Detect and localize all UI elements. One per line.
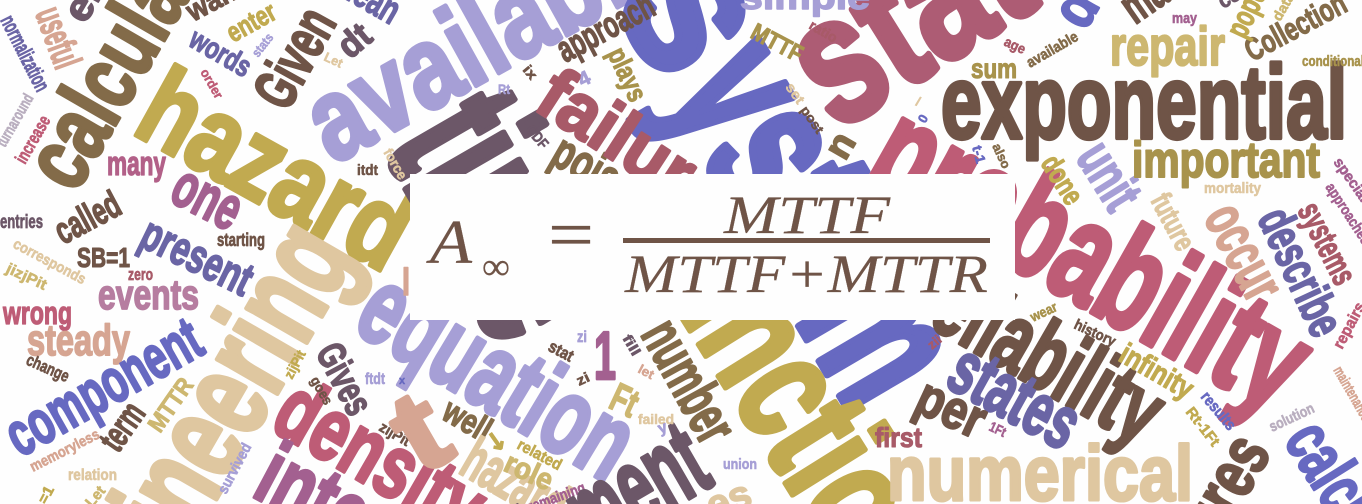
- word: mortality: mortality: [1204, 180, 1262, 197]
- word: 0: 0: [915, 112, 931, 126]
- word: MTTR: MTTR: [143, 373, 199, 437]
- word: stats: stats: [249, 30, 276, 60]
- word: useful: useful: [27, 1, 89, 74]
- word: words: words: [183, 22, 257, 84]
- word: survived: survived: [215, 440, 255, 497]
- word: present: present: [132, 207, 261, 307]
- word: well: well: [435, 391, 499, 450]
- word: 4: 4: [575, 67, 595, 92]
- word: SB=1: SB=1: [77, 242, 130, 273]
- word: Ft: Ft: [603, 375, 645, 426]
- word: ratio: ratio: [806, 17, 840, 46]
- word: wrong: wrong: [2, 295, 72, 331]
- word: MTTF: MTTF: [746, 18, 807, 68]
- word: may: may: [1172, 10, 1198, 27]
- word: age: age: [1002, 33, 1029, 57]
- word: union: union: [723, 456, 757, 473]
- formula panel: [410, 174, 1015, 320]
- word: many: many: [107, 145, 166, 183]
- word: change: change: [23, 350, 72, 386]
- word: failure: failure: [523, 52, 745, 236]
- numerator: MTTF: [723, 185, 891, 245]
- word: 1Ft: 1Ft: [987, 418, 1009, 440]
- word: Gives: Gives: [307, 336, 381, 422]
- word: entries: entries: [0, 212, 43, 233]
- word: important: important: [1132, 132, 1320, 188]
- word: set: set: [783, 80, 808, 107]
- word: repair: repair: [1110, 15, 1225, 77]
- word: infinity: infinity: [1114, 337, 1199, 406]
- word: zero: zero: [128, 265, 153, 284]
- word: x: x: [399, 375, 406, 387]
- word: zi brown: zi: [574, 369, 592, 389]
- word: corresponds: corresponds: [10, 236, 89, 288]
- word: called: called: [48, 183, 128, 253]
- word: first: first: [875, 422, 922, 453]
- word: Rt: Rt: [498, 81, 510, 97]
- word: goes: goes: [307, 374, 336, 408]
- word: y: y: [656, 419, 670, 438]
- word: post: post: [798, 103, 827, 137]
- word: zijPit gold: zijPit: [281, 347, 309, 381]
- word: slash: /: [914, 94, 923, 109]
- word: sum: sum: [971, 53, 1017, 84]
- word: term: term: [91, 394, 153, 459]
- word: ix: ix: [520, 62, 541, 83]
- word: occur: occur: [1192, 192, 1298, 311]
- word: ftdt: ftdt: [365, 371, 386, 388]
- word: jizjPit: jizjPit: [2, 260, 49, 294]
- word: history: history: [1071, 316, 1119, 350]
- word: related: related: [514, 437, 564, 474]
- word: dt: dt: [329, 14, 380, 66]
- equals sign: =: [548, 197, 594, 274]
- word: Let: Let: [322, 49, 346, 71]
- word: zi lavender: zi: [577, 329, 587, 346]
- word: starting: starting: [217, 230, 265, 250]
- word: zijPit brown: zijPit: [376, 419, 413, 450]
- word: events: events: [98, 271, 199, 318]
- word: per: per: [907, 365, 997, 450]
- word: itdt: itdt: [357, 162, 378, 179]
- word: relation: relation: [68, 467, 117, 484]
- word: also: also: [989, 141, 1014, 171]
- word: wear: wear: [1027, 298, 1060, 325]
- fraction bar: [623, 238, 990, 243]
- denominator: MTTF+MTTR: [624, 244, 988, 304]
- word: t-1: t-1: [969, 144, 989, 165]
- word: system: [573, 0, 1014, 440]
- word: poisson: poisson: [542, 123, 683, 237]
- word: force: force: [380, 146, 411, 182]
- word: t: t: [368, 365, 471, 498]
- formula left side A: A: [426, 209, 473, 277]
- word: 1: 1: [594, 318, 616, 394]
- word: role: role: [499, 446, 558, 497]
- word: failed: failed: [638, 411, 674, 427]
- formula: availability equals MTTF over MTTF plus MTTR: [426, 185, 990, 304]
- word: fill: fill: [619, 332, 644, 359]
- word: increase: increase: [11, 112, 54, 167]
- word: done: done: [1034, 149, 1090, 211]
- word: let: let: [636, 361, 657, 382]
- word: l: l: [402, 262, 410, 304]
- word: future: future: [1144, 188, 1201, 256]
- word: solution: solution: [1267, 400, 1317, 436]
- word: CDF: CDF: [522, 122, 552, 152]
- word: hazard: hazard: [118, 44, 434, 295]
- word: n: n: [816, 125, 865, 166]
- arrow: →: [477, 424, 514, 459]
- infinity subscript: ∞: [482, 246, 510, 288]
- word: zii: zii: [924, 332, 945, 352]
- word: component: component: [0, 304, 214, 470]
- word: memoryless: memoryless: [27, 426, 103, 476]
- word: unit: unit: [1064, 130, 1154, 222]
- word: plays: plays: [602, 42, 653, 106]
- word: one: one: [161, 151, 254, 244]
- word: Rt-1Ft: Rt-1Ft: [1182, 404, 1223, 450]
- word: results: results: [1197, 389, 1239, 434]
- word: order: order: [197, 66, 226, 101]
- word: steady: steady: [27, 316, 130, 365]
- word: available: available: [1024, 28, 1081, 71]
- word: stat: stat: [545, 337, 577, 366]
- word: states: states: [935, 326, 1096, 465]
